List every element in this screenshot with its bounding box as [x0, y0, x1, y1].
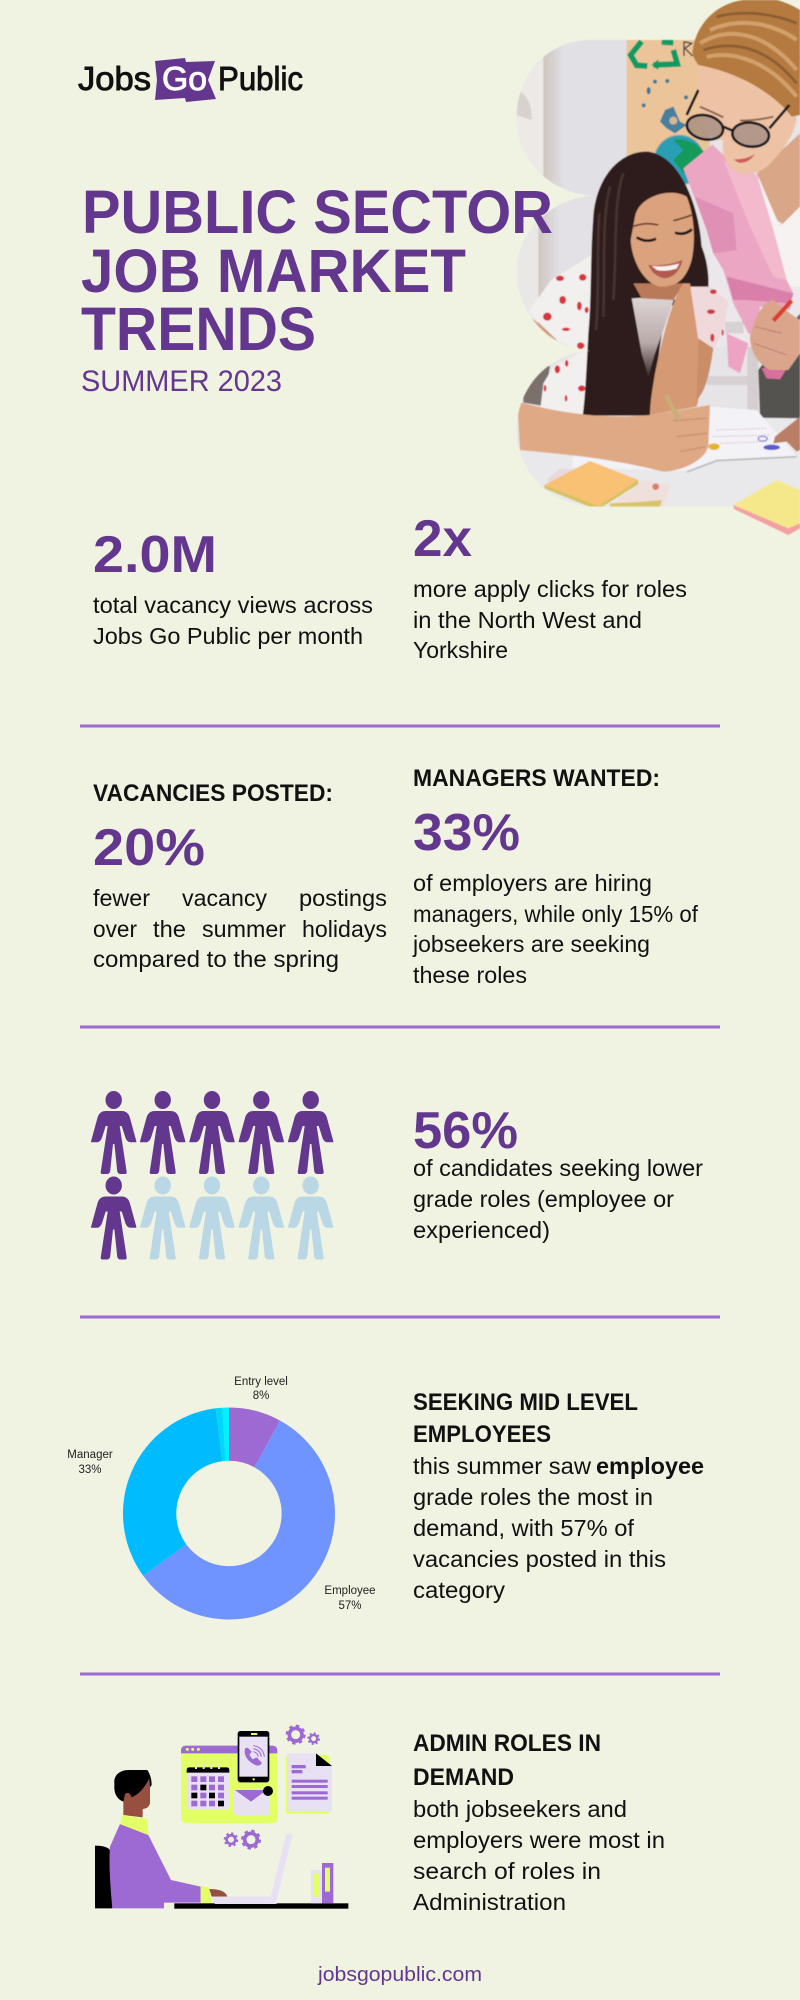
text: seeking mid level employees: EMPLOYEES — [413, 1421, 551, 1448]
text: admin roles in demand: DEMAND — [413, 1764, 514, 1791]
logo: Jobs — [78, 60, 151, 97]
stat: 56% candidates: of candidates seeking lower — [413, 1155, 703, 1181]
stat: managers wanted 33%: these roles — [413, 962, 527, 988]
text: seeking mid level employees — [413, 1389, 704, 1603]
stat: managers wanted 33%: of employers are hiring — [413, 870, 652, 896]
stat: 56% candidates: experienced) — [413, 1217, 550, 1243]
stat: 2.0M vacancy views: Jobs Go Public per month — [93, 623, 363, 649]
stat: 2.0M vacancy views — [93, 526, 373, 649]
title: JOB MARKET — [81, 237, 466, 305]
stat: 2x apply clicks: 2x — [413, 510, 472, 568]
subtitle: SUMMER 2023 — [81, 365, 282, 398]
text: admin roles in demand: search of roles in — [413, 1858, 601, 1884]
text: admin roles in demand: both jobseekers and — [413, 1796, 627, 1822]
text: seeking mid level employees: employee — [596, 1453, 704, 1479]
chart label: entry level: 8% — [253, 1390, 269, 1402]
title — [81, 178, 553, 363]
stat: 2.0M vacancy views: total vacancy views across — [93, 592, 373, 618]
stat: vacancies posted 20%: fewer — [93, 885, 150, 911]
text: admin roles in demand: ADMIN ROLES IN — [413, 1730, 601, 1757]
stat: 56% candidates: grade roles (employee or — [413, 1186, 674, 1212]
stat: vacancies posted 20%: postings — [299, 885, 387, 911]
stat: 2.0M vacancy views: 2.0M — [93, 526, 217, 584]
text: seeking mid level employees: demand, with 57% of — [413, 1515, 635, 1541]
text: seeking mid level employees: vacancies posted in this — [413, 1546, 666, 1572]
text: seeking mid level employees: SEEKING MID LEVEL — [413, 1389, 638, 1416]
chart label: employee: Employee — [324, 1585, 376, 1597]
illustration: office worker at laptop with floating apps — [95, 1726, 348, 1909]
teacher figure overflowing the frame — [683, 0, 800, 379]
stat: vacancies posted 20% — [93, 780, 387, 972]
pictogram: 6 of 10 people highlighted — [91, 1091, 333, 1260]
stat: 2x apply clicks: Yorkshire — [413, 637, 508, 663]
sticky note overflowing the frame — [733, 480, 800, 535]
text: seeking mid level employees: grade roles the most in — [413, 1484, 653, 1510]
stat: vacancies posted 20%: vacancy — [182, 885, 268, 911]
title: PUBLIC SECTOR — [82, 178, 553, 246]
stat: vacancies posted 20%: 20% — [93, 819, 205, 877]
text: seeking mid level employees: this summer saw — [413, 1453, 591, 1479]
stat: managers wanted 33% — [412, 765, 699, 988]
stat: managers wanted 33%: MANAGERS WANTED: — [413, 765, 660, 792]
stat: managers wanted 33%: 33% — [413, 804, 520, 862]
stat: vacancies posted 20%: summer — [202, 916, 286, 942]
text: admin roles in demand: Administration — [413, 1889, 566, 1915]
stat: vacancies posted 20%: over — [93, 916, 137, 942]
stat: managers wanted 33%: managers, while only 15% of — [413, 901, 699, 927]
logo: Go — [162, 60, 207, 97]
logo: Public — [218, 60, 303, 97]
chart label: manager: 33% — [78, 1464, 102, 1476]
stat: managers wanted 33%: jobseekers are seeking — [412, 931, 650, 957]
stat: vacancies posted 20%: holidays — [302, 916, 387, 942]
donut chart: vacancies by grade — [67, 1376, 376, 1619]
text: seeking mid level employees: category — [413, 1577, 506, 1603]
stat: vacancies posted 20%: compared to the spring — [93, 946, 339, 972]
chart label: employee: 57% — [338, 1600, 362, 1612]
title: TRENDS — [81, 295, 316, 363]
stat: 2x apply clicks: in the North West and — [413, 607, 642, 633]
logo — [78, 58, 303, 102]
chart label: manager: Manager — [67, 1449, 113, 1461]
stat: 2x apply clicks — [413, 510, 687, 663]
text: admin roles in demand — [413, 1730, 665, 1915]
stat: 56% candidates — [413, 1102, 703, 1243]
stat: 2x apply clicks: more apply clicks for roles — [413, 576, 687, 602]
stat: 56% candidates: 56% — [413, 1102, 518, 1160]
chart label: entry level: Entry level — [234, 1376, 288, 1388]
photo: teacher helping a student in a scalloped frame — [510, 0, 800, 535]
stat: vacancies posted 20%: the — [153, 916, 186, 942]
stat: vacancies posted 20%: VACANCIES POSTED: — [93, 780, 333, 807]
footer url: jobsgopublic.com — [317, 1964, 482, 1986]
text: admin roles in demand: employers were most in — [413, 1827, 665, 1853]
